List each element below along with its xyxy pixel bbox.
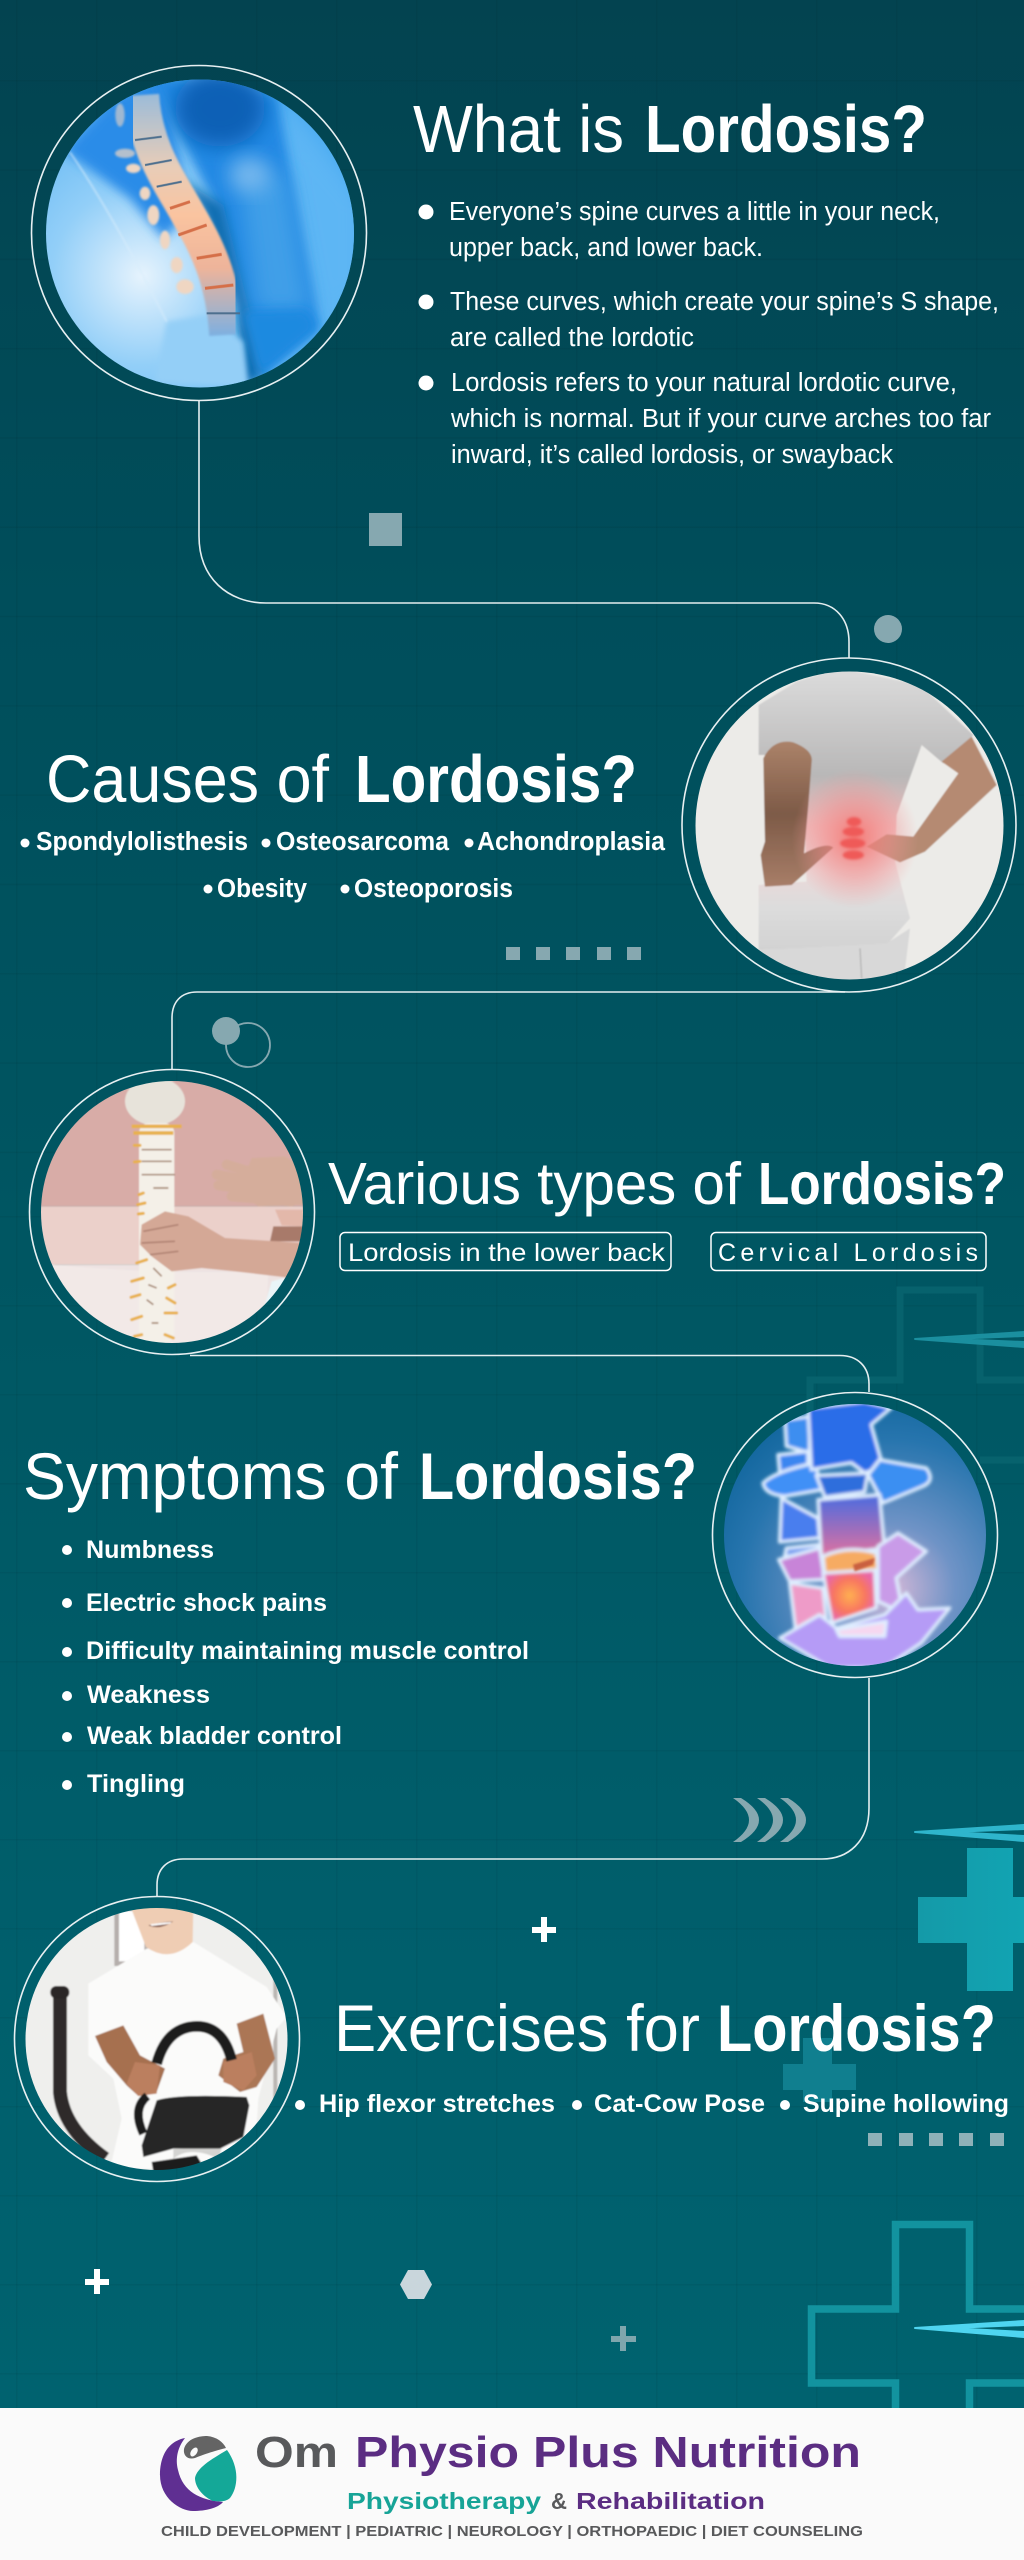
tag: cervical lordosis bbox=[711, 1232, 986, 1270]
footer band bbox=[0, 2408, 1024, 2560]
brand name: Om bbox=[255, 2428, 338, 2477]
panel: various types bbox=[25, 1017, 1006, 1365]
decoration: five squares bbox=[868, 2133, 1004, 2146]
title: causes bbox=[46, 742, 637, 817]
causes list: Spondylolisthesis bbox=[36, 828, 248, 856]
photo: man on exercise machine bbox=[26, 1908, 288, 2170]
title: causes: Causes of bbox=[46, 742, 329, 817]
title: what is lordosis: Lordosis? bbox=[645, 92, 927, 167]
tagline: Physiotherapy bbox=[347, 2488, 541, 2514]
title: what is lordosis: What is bbox=[413, 92, 624, 167]
panel: causes of lordosis bbox=[20, 655, 1020, 995]
decoration: square bbox=[369, 513, 402, 546]
causes list: Obesity bbox=[217, 875, 308, 903]
tagline bbox=[347, 2488, 765, 2514]
photo: man holding lower back bbox=[696, 672, 1004, 980]
symptoms list: Tingling bbox=[87, 1770, 185, 1798]
decorative pulse line, lower bbox=[915, 2321, 1024, 2337]
decorative outline cross, upper bbox=[810, 1290, 1024, 1470]
decorative filled cross, small bbox=[783, 2038, 856, 2102]
title: various types bbox=[328, 1151, 1006, 1217]
symptoms list: Numbness bbox=[86, 1536, 214, 1564]
bullet list: definition: Lordosis refers to your natural lordotic curve, bbox=[451, 369, 957, 397]
tag: cervical lordosis: Cervical Lordosis bbox=[718, 1239, 978, 1267]
photo: glowing vertebrae bbox=[724, 1404, 986, 1666]
title: various types: Various types of bbox=[328, 1151, 742, 1217]
tagline: & bbox=[551, 2488, 567, 2514]
title: symptoms bbox=[23, 1439, 697, 1513]
decorative outline cross, lower bbox=[812, 2224, 1024, 2408]
icon: plus white bbox=[85, 2269, 109, 2294]
tag: lordosis in the lower back bbox=[340, 1232, 671, 1270]
symptoms list: Weak bladder control bbox=[87, 1722, 342, 1750]
decoration: dot bbox=[874, 615, 902, 643]
photo: spine model held against back bbox=[41, 1081, 303, 1343]
exercises list: Supine hollowing bbox=[803, 2090, 1009, 2118]
causes list: Achondroplasia bbox=[477, 828, 666, 856]
decorative pulse line, middle bbox=[915, 1825, 1024, 1841]
bullet list: definition bbox=[418, 198, 999, 469]
title: what is lordosis bbox=[413, 92, 927, 167]
icon: logo bbox=[160, 2436, 236, 2511]
title: exercises: Exercises for bbox=[334, 1991, 700, 2065]
exercises list bbox=[295, 2090, 1009, 2118]
photo: spine side view in blue bbox=[46, 80, 354, 388]
panel: exercises bbox=[10, 1892, 1009, 2351]
brand name: Physio Plus Nutrition bbox=[355, 2428, 861, 2477]
causes list: Osteoporosis bbox=[354, 875, 513, 903]
symptoms list bbox=[62, 1536, 529, 1798]
title: exercises bbox=[334, 1991, 996, 2065]
tagline: Rehabilitation bbox=[576, 2488, 765, 2514]
causes list: Osteosarcoma bbox=[276, 828, 450, 856]
decoration: three chevrons bbox=[733, 1798, 806, 1842]
decoration: hexagon bbox=[400, 2270, 432, 2299]
ring: photo 1 bbox=[32, 66, 366, 400]
services line: CHILD DEVELOPMENT | PEDIATRIC | NEUROLOGY | ORTHOPAEDIC | DIET COUNSELING bbox=[161, 2523, 863, 2540]
ring: photo 5 bbox=[14, 1896, 300, 2182]
ring: photo 4 bbox=[712, 1392, 998, 1678]
ring: photo 2 bbox=[682, 658, 1016, 992]
bullet list: definition: which is normal. But if your curve arches too far bbox=[450, 405, 992, 433]
bullet list: definition: are called the lordotic bbox=[450, 324, 694, 352]
bullet list: definition: Everyone’s spine curves a little in your neck, bbox=[449, 198, 940, 226]
tag: lordosis in the lower back: Lordosis in the lower back bbox=[348, 1239, 666, 1267]
bullet list: definition: inward, it’s called lordosis, or swayback bbox=[451, 441, 893, 469]
symptoms list: Electric shock pains bbox=[86, 1589, 327, 1617]
icon: plus bbox=[532, 1917, 556, 1942]
decorative pulse line, upper bbox=[915, 1332, 1024, 1347]
connector lines bbox=[157, 401, 869, 1896]
bullet list: definition: These curves, which create your spine’s S shape, bbox=[450, 288, 999, 316]
decoration: overlapping circles bbox=[212, 1017, 270, 1067]
ring: photo 3 bbox=[30, 1070, 314, 1354]
icon: plus grey bbox=[611, 2326, 636, 2351]
title: symptoms: Symptoms of bbox=[23, 1439, 399, 1513]
bullet list: definition: upper back, and lower back. bbox=[449, 234, 763, 262]
panel: symptoms bbox=[23, 1388, 1003, 1842]
title: causes: Lordosis? bbox=[355, 742, 637, 817]
symptoms list: Difficulty maintaining muscle control bbox=[86, 1637, 529, 1665]
symptoms list: Weakness bbox=[87, 1681, 210, 1709]
title: symptoms: Lordosis? bbox=[419, 1439, 697, 1513]
exercises list: Hip flexor stretches bbox=[319, 2090, 555, 2118]
panel: what is lordosis bbox=[30, 65, 999, 643]
decorative filled cross, large bbox=[918, 1848, 1024, 1991]
causes list bbox=[20, 828, 666, 903]
exercises list: Cat-Cow Pose bbox=[594, 2090, 765, 2118]
decoration: five squares bbox=[506, 947, 641, 960]
